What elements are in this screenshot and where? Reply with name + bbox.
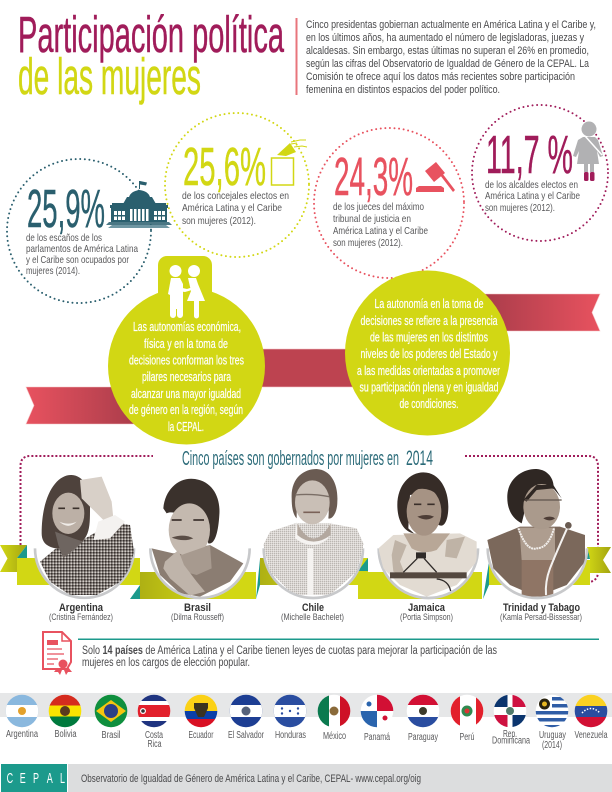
intro paragraph <box>306 19 596 96</box>
flag labels: Costa <box>145 730 163 741</box>
flag: Perú <box>450 694 484 726</box>
intro divider bar <box>296 18 298 95</box>
flag labels: Rep. <box>503 729 517 740</box>
caption: Brasil: Brasil <box>184 602 211 614</box>
flag: Honduras <box>273 694 307 728</box>
flag labels: (2014) <box>542 740 562 751</box>
panel: judges statistic: América Latina y el Caribe <box>333 225 428 237</box>
flag: El Salvador <box>229 694 263 728</box>
panel: parliament statistic: de los escaños de los <box>26 232 102 244</box>
flag: Uruguay <box>535 694 569 728</box>
portrait: Portia Simpson <box>378 472 478 598</box>
quota callout: Solo 14 países de América Latina y el Caribe tienen leyes de cuotas para mejorar la participación de las <box>82 645 497 657</box>
dotted frame around presidents <box>20 456 598 582</box>
panel: councillors statistic: de los concejales electos en <box>182 190 289 202</box>
panel: councillors statistic: América Latina y el Caribe <box>182 202 282 214</box>
quota callout <box>78 638 599 669</box>
panel: judges statistic: de los jueces del máximo <box>333 201 424 213</box>
panel: mayors statistic: América Latina y el Caribe <box>485 190 580 202</box>
panel: autonomies circle: decisiones conforman los tres <box>129 352 244 368</box>
panel: councillors statistic: 25,6% <box>183 137 266 197</box>
title: de las mujeres <box>18 48 201 105</box>
flag: México <box>317 694 351 728</box>
flag: Panamá <box>360 694 394 728</box>
footer bar: CEPAL <box>7 770 65 787</box>
flag labels: Bolivia <box>54 729 77 740</box>
heading: five countries <box>182 447 433 470</box>
flag labels: Honduras <box>275 730 306 741</box>
caption: Chile <box>281 602 344 623</box>
panel: judges statistic: tribunal de justicia en <box>333 213 411 225</box>
panel: judges statistic: 24,3% <box>334 147 413 207</box>
panel: autonomies circle <box>108 256 265 444</box>
panel: parliament statistic: mujeres (2014). <box>26 265 80 277</box>
ribbon: autonomy banner <box>26 294 600 424</box>
caption: Jamaica: Jamaica <box>408 602 446 614</box>
panel: autonomies circle: alcanzar una mayor igualdad <box>131 386 241 401</box>
icon: parliament building <box>106 181 172 228</box>
panel: parliament statistic <box>7 159 172 303</box>
panel: mayors statistic: son mujeres (2012). <box>485 202 555 214</box>
panel: parliament statistic: y el Caribe son ocupados por <box>26 254 129 266</box>
portrait: Dilma Rousseff <box>150 479 250 598</box>
title <box>18 6 284 105</box>
caption: Trinidad y Tabago: Trinidad y Tabago <box>503 602 580 614</box>
panel: autonomies circle: la CEPAL. <box>168 419 204 434</box>
flag labels: Ecuador <box>188 730 214 741</box>
panel: decision-making autonomy circle: de condiciones. <box>400 396 458 411</box>
panel: autonomies circle: Las autonomías económica, <box>133 319 241 334</box>
caption: Argentina: Argentina <box>59 602 104 614</box>
title: Participación política <box>18 6 284 63</box>
flag labels: Dominicana <box>492 736 530 746</box>
panel: decision-making autonomy circle: niveles de los poderes del Estado y <box>360 346 498 361</box>
heading: five countries: 2014 <box>406 447 433 470</box>
caption: Trinidad y Tabago <box>500 602 582 623</box>
panel: mayors statistic: de los alcaldes electos en <box>485 179 578 191</box>
flag: Bolivia <box>48 694 82 728</box>
panel: judges statistic <box>314 128 464 278</box>
icon: law document <box>43 632 72 675</box>
ribbon: presidents band <box>0 545 611 599</box>
flag: Costa Rica <box>137 694 171 728</box>
panel: parliament statistic: 25,9% <box>27 179 105 239</box>
panel: judges statistic: son mujeres (2012). <box>333 237 403 249</box>
panel: decision-making autonomy circle: su participación plena y en igualdad <box>360 380 498 394</box>
flag labels: Panamá <box>364 732 390 743</box>
caption: Argentina <box>49 602 113 623</box>
flag labels: Argentina <box>6 729 38 740</box>
panel: decision-making autonomy circle: de las mujeres en los distintos <box>370 330 488 344</box>
panel: mayors statistic <box>472 105 608 241</box>
flag: Venezuela <box>574 694 608 728</box>
flag labels: Rica <box>148 739 162 750</box>
portrait: Cristina Fernández <box>35 475 134 598</box>
panel: decision-making autonomy circle: a las medidas orientadas a promover <box>357 363 500 378</box>
icon: woman with sash <box>573 122 603 181</box>
flag labels: El Salvador <box>228 730 264 741</box>
quota callout: mujeres en los cargos de elección popular. <box>82 657 250 669</box>
caption: Brasil <box>171 602 224 623</box>
flags band <box>0 693 612 717</box>
caption: Jamaica: (Portia Simpson) <box>400 612 453 623</box>
caption: Chile: (Michelle Bachelet) <box>281 612 344 623</box>
panel: autonomies circle: de género en la región, según <box>129 402 243 417</box>
icon: handshake <box>168 265 205 318</box>
panel: councillors statistic <box>165 113 309 257</box>
panel: autonomies circle: física y en la toma de <box>144 336 228 351</box>
flag: Brasil <box>94 694 128 728</box>
caption: Argentina: (Cristina Fernández) <box>49 612 113 623</box>
icon: gavel <box>416 162 455 192</box>
flag labels <box>6 729 608 751</box>
flag: Paraguay <box>406 694 440 728</box>
panel: decision-making autonomy circle <box>345 270 510 436</box>
footer bar <box>1 764 612 792</box>
panel: autonomies circle: pilares necesarios para <box>142 369 232 384</box>
icon: ballot box <box>272 140 307 185</box>
flag labels: Brasil <box>102 730 120 741</box>
caption: Chile: Chile <box>302 602 324 614</box>
panel: decision-making autonomy circle: La autonomía en la toma de <box>374 296 484 311</box>
footer bar: Observatorio de Igualdad de Género de América Latina y el Caribe, CEPAL- www.cepal.org/oig <box>81 773 421 785</box>
caption: Trinidad y Tabago: (Kamla Persad-Bissessar) <box>500 612 582 623</box>
portrait: Kamla Persad-Bissessar <box>487 469 587 598</box>
intro paragraph: femenina en distintos espacios del poder político. <box>306 84 500 96</box>
panel: councillors statistic: son mujeres (2012). <box>182 215 256 227</box>
flag labels: Perú <box>460 732 474 743</box>
heading: five countries: Cinco países son gobernados por mujeres en <box>182 448 399 470</box>
panel: parliament statistic: parlamentos de América Latina <box>26 243 138 255</box>
flag labels: Uruguay <box>539 730 566 741</box>
flag labels: Paraguay <box>408 732 438 743</box>
caption: Jamaica <box>400 602 453 623</box>
caption: Brasil: (Dilma Rousseff) <box>171 612 224 623</box>
flag: Ecuador <box>184 694 218 728</box>
portrait: Michelle Bachelet <box>263 469 364 598</box>
flag: Rep. Dominicana <box>493 694 527 728</box>
flag labels: México <box>323 731 346 742</box>
panel: decision-making autonomy circle: decisiones se refiere a la presencia <box>360 313 498 328</box>
flag: Argentina <box>5 694 39 728</box>
